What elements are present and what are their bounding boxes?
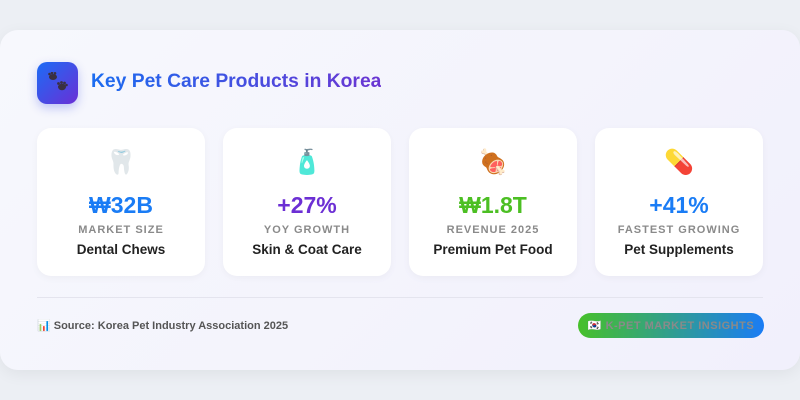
card: supplements: 💊 <box>664 149 694 176</box>
card: premium food: Premium Pet Food <box>433 242 553 257</box>
card: skin & coat: 🧴 <box>292 149 322 176</box>
card: skin & coat: Skin & Coat Care <box>252 242 362 257</box>
card: dental chews: MARKET SIZE <box>78 224 164 236</box>
card: premium food: 🍖 <box>478 149 508 176</box>
card: premium food: REVENUE 2025 <box>447 224 539 236</box>
card: supplements: FASTEST GROWING <box>618 224 740 236</box>
icon: paws <box>37 62 78 104</box>
source text: 📊 Source: Korea Pet Industry Association 2025 <box>37 320 288 332</box>
card: dental chews: Dental Chews <box>77 242 165 257</box>
badge: 🇰🇷 K-PET MARKET INSIGHTS <box>588 320 754 332</box>
card: premium food: ₩1.8T <box>459 192 527 218</box>
badge <box>578 313 764 338</box>
card: premium food <box>409 128 577 276</box>
card: supplements: Pet Supplements <box>624 242 734 257</box>
card: dental chews: ₩32B <box>89 192 153 218</box>
card: dental chews <box>37 128 205 276</box>
card: skin & coat: YOY GROWTH <box>264 224 350 236</box>
card: supplements: +41% <box>649 192 709 218</box>
card: dental chews: 🦷 <box>106 149 136 176</box>
card: supplements <box>595 128 763 276</box>
title: Key Pet Care Products in Korea <box>91 71 381 92</box>
card: skin & coat <box>223 128 391 276</box>
card: skin & coat: +27% <box>277 192 337 218</box>
